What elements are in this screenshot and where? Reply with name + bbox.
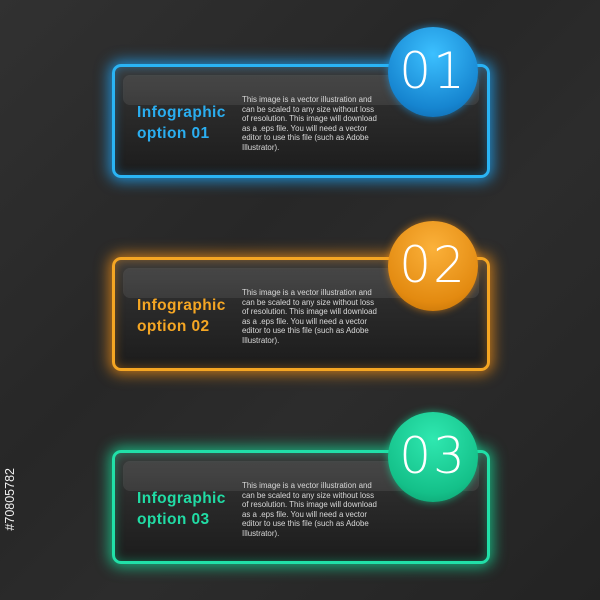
heading: option 02: Infographic xyxy=(137,297,226,314)
panel: option 03 xyxy=(112,450,490,564)
icon: number circle 02 xyxy=(388,221,478,311)
panel: option 01 xyxy=(112,64,490,178)
text block: option 01: of resolution. This image will download xyxy=(242,114,377,123)
text block: option 03: of resolution. This image will download xyxy=(242,500,377,509)
text block: option 02: can be scaled to any size without loss xyxy=(242,298,374,307)
heading: option 02 xyxy=(137,297,226,335)
heading: option 03: Infographic xyxy=(137,490,226,507)
text block: option 01: as a .eps file. You will need a vector xyxy=(242,124,367,133)
text block: option 01: This image is a vector illustration and xyxy=(242,95,372,104)
text block: option 02: of resolution. This image will download xyxy=(242,307,377,316)
heading: option 03 xyxy=(137,490,226,528)
heading: option 02: option 02 xyxy=(137,318,210,335)
icon: number circle 01 xyxy=(388,27,478,117)
text block: option 03: This image is a vector illustration and xyxy=(242,481,372,490)
icon: number circle 03: 03 xyxy=(399,427,467,485)
text block: option 03: editor to use this file (such as Adobe xyxy=(242,519,369,528)
panel: option 02 xyxy=(112,257,490,371)
heading: option 01: option 01 xyxy=(137,125,210,142)
text block: option 01: Illustrator). xyxy=(242,143,279,152)
text block: option 02: editor to use this file (such as Adobe xyxy=(242,326,369,335)
text block: option 02: as a .eps file. You will need a vector xyxy=(242,317,367,326)
text block: option 03: Illustrator). xyxy=(242,529,279,538)
text block: option 01: can be scaled to any size without loss xyxy=(242,105,374,114)
text block: option 03: can be scaled to any size without loss xyxy=(242,491,374,500)
text block: option 02: This image is a vector illustration and xyxy=(242,288,372,297)
heading: option 03: option 03 xyxy=(137,511,210,528)
heading: option 01: Infographic xyxy=(137,104,226,121)
stock id label: #70805782 xyxy=(3,468,17,531)
text block: option 01 xyxy=(242,95,377,152)
icon: number circle 01: 01 xyxy=(399,42,467,100)
text block: option 02 xyxy=(242,288,377,345)
icon: number circle 03 xyxy=(388,412,478,502)
text block: option 01: editor to use this file (such as Adobe xyxy=(242,133,369,142)
heading: option 01 xyxy=(137,104,226,142)
text block: option 03 xyxy=(242,481,377,538)
text block: option 03: as a .eps file. You will need a vector xyxy=(242,510,367,519)
text block: option 02: Illustrator). xyxy=(242,336,279,345)
icon: number circle 02: 02 xyxy=(399,236,467,294)
